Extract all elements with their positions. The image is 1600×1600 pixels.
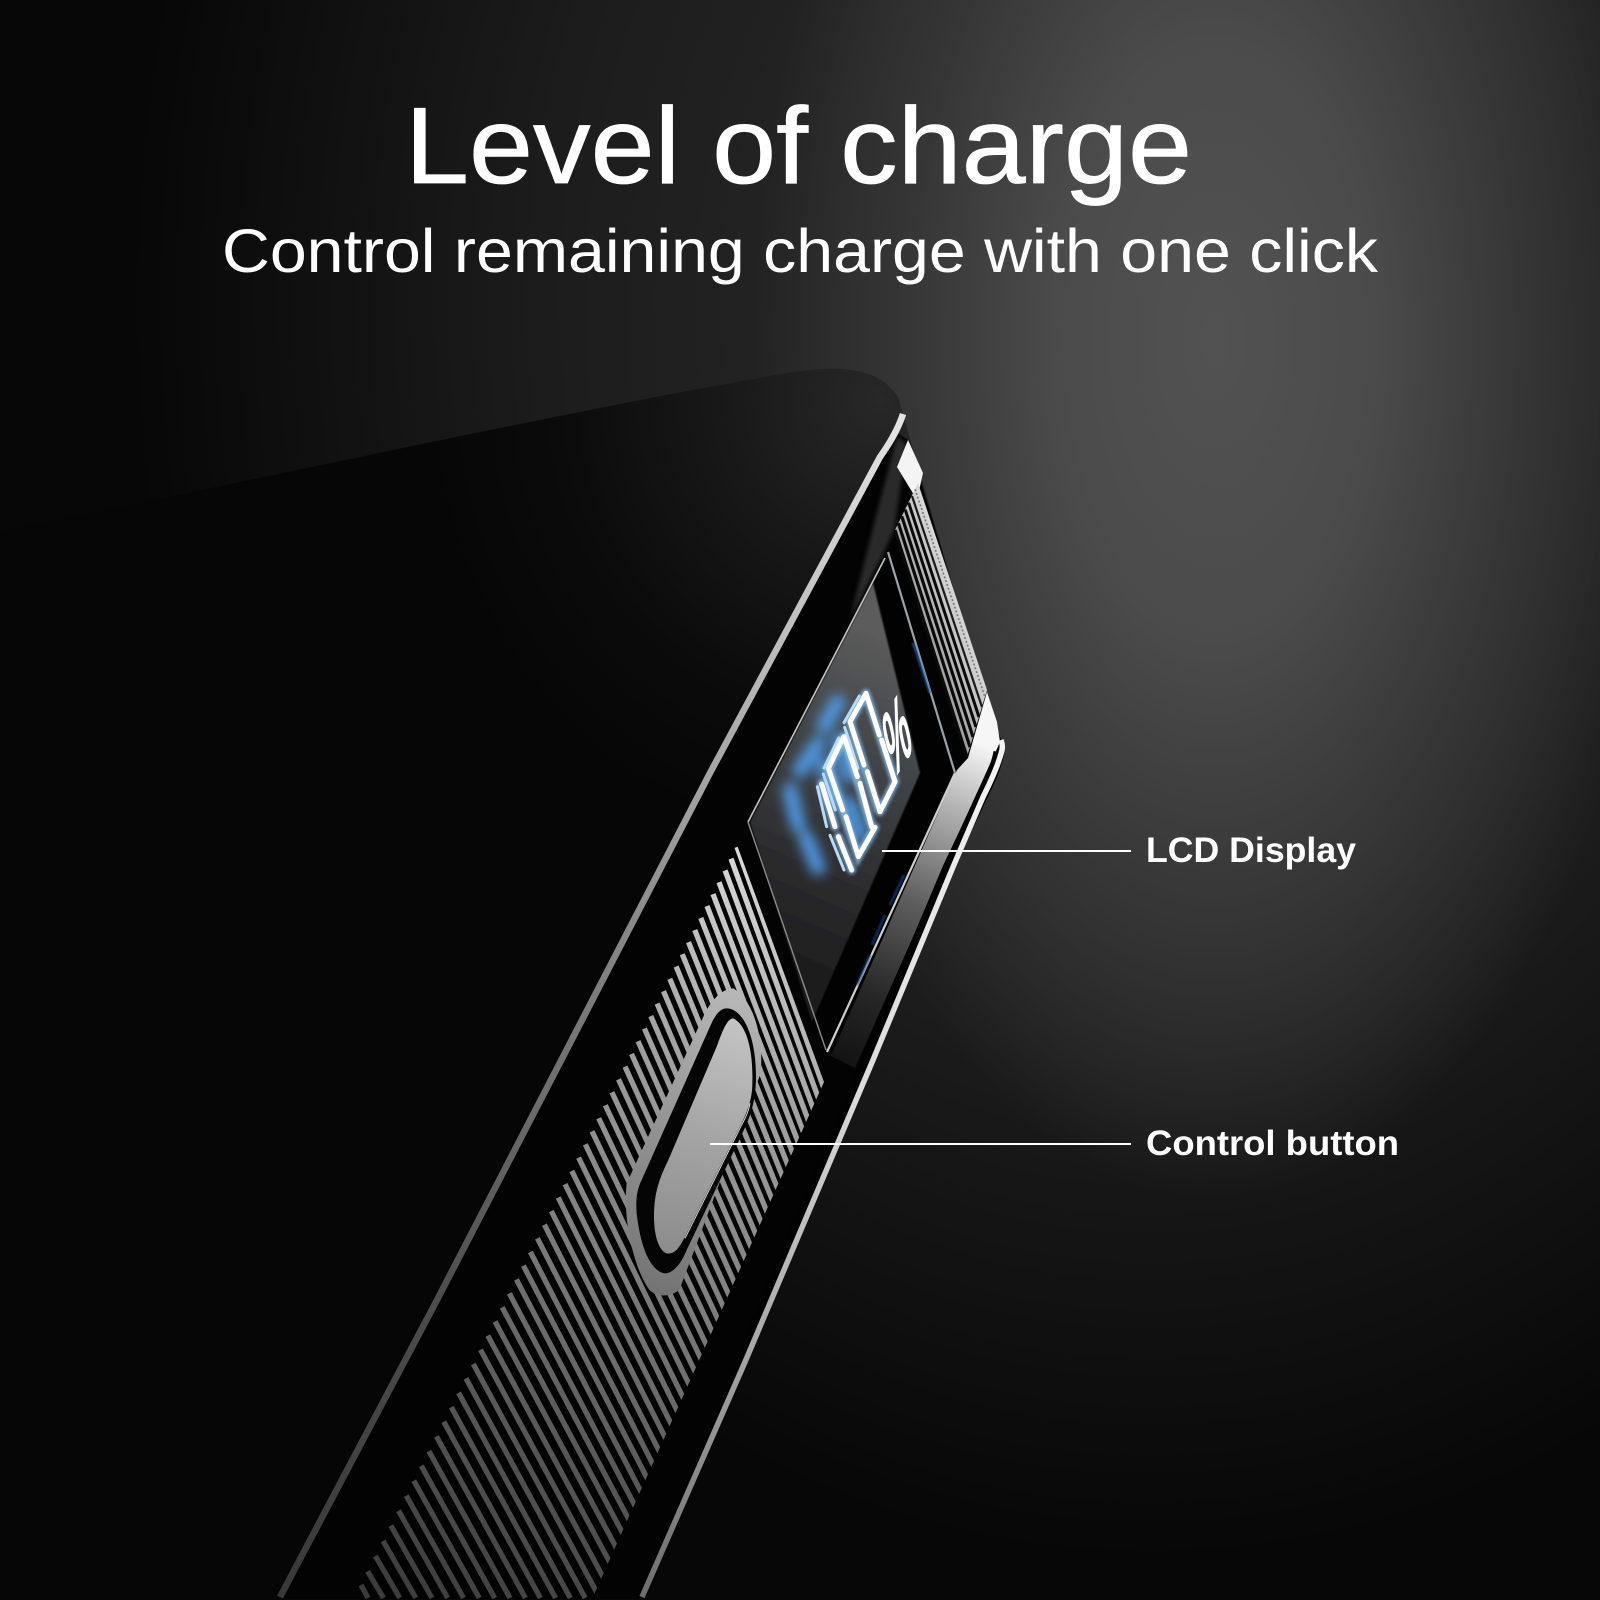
outer silver edge [642,740,1002,1597]
LCD bezel lines [748,552,955,1052]
label: LCD Display [1146,831,1357,870]
leader line [710,1143,1131,1145]
pale blue secondary segments [817,696,859,870]
front face top shading [850,436,907,620]
top silver edge [280,414,903,1597]
button rim highlight [685,1103,750,1238]
button collar [626,988,761,1295]
front face [280,433,1000,1599]
white corner block [897,440,923,500]
faint blue reflections [857,643,930,985]
button recess [636,1008,756,1273]
lower silver band [831,692,1000,1068]
LCD readout 100% [790,675,917,870]
subtitle: Control remaining charge with one click [222,217,1379,285]
label: Control button [1146,1124,1399,1163]
lower front grille stripes [361,847,845,1598]
LCD panel [748,552,955,1052]
leader line [882,850,1131,852]
title: Level of charge [405,85,1192,207]
blue ghost digits [790,702,860,868]
control button [626,988,761,1295]
device: power bank [277,369,1006,1599]
percent sign: % [877,675,917,798]
black gap by outer edge [744,752,999,1352]
LCD lit glass [750,583,920,1022]
soft glow under digits [822,693,895,870]
white digit segments [822,693,895,870]
LCD black frame [748,555,955,1052]
upper side grille [895,483,987,757]
button cap [654,1018,752,1254]
device body top face [0,369,1004,1599]
